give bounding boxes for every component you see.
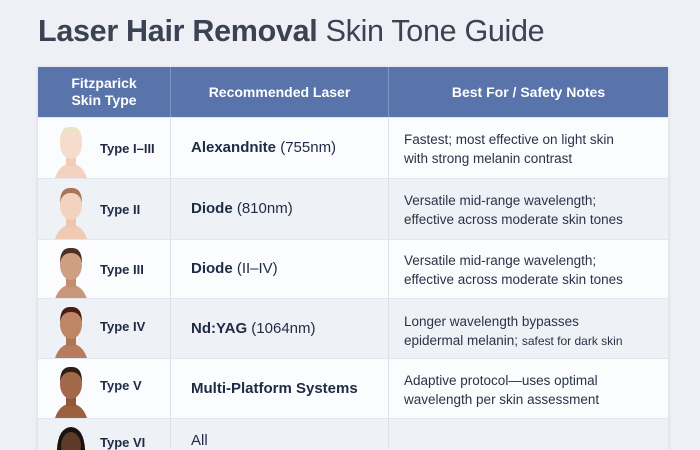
- row: type II: Versatile mid-range wavelength;: [404, 193, 596, 208]
- row: type II: effective across moderate skin tones: [404, 212, 623, 227]
- header row: Recommended Laser: [209, 84, 350, 100]
- row: type VI: [38, 418, 668, 450]
- table: [38, 67, 668, 450]
- title: Laser Hair Removal Skin Tone Guide: [38, 14, 544, 48]
- row: type III: Versatile mid-range wavelength;: [404, 253, 596, 268]
- row: type V: wavelength per skin assessment: [404, 392, 599, 407]
- row: type III: Diode (II–IV): [191, 260, 278, 277]
- row: type IV: epidermal melanin; safest for dark skin: [404, 333, 623, 348]
- row: type II: [38, 178, 668, 239]
- icon: face light-medium: [55, 188, 87, 239]
- row: type II: Diode (810nm): [191, 200, 293, 217]
- icon: face light: [55, 127, 87, 178]
- row: type V: Adaptive protocol—uses optimal: [404, 373, 598, 388]
- row: type V: Multi-Platform Systems: [191, 380, 358, 397]
- row: type III: [38, 239, 668, 298]
- row: type III: Type III: [100, 262, 144, 277]
- row: type I-III: Alexandnite (755nm): [191, 139, 336, 156]
- header row: Fitzparick: [71, 75, 137, 91]
- header row: [38, 67, 668, 117]
- header row: Skin Type: [71, 92, 137, 108]
- row: type I-III: with strong melanin contrast: [404, 151, 572, 166]
- row: type II: Type II: [100, 202, 140, 217]
- row: type I-III: Fastest; most effective on light skin: [404, 132, 614, 147]
- row: type I-III: Type I–III: [100, 141, 155, 156]
- row: type IV: Nd:YAG (1064nm): [191, 320, 316, 337]
- row: type IV: [38, 298, 668, 358]
- row: type IV: Type IV: [100, 319, 145, 334]
- icon: face tan: [55, 307, 87, 358]
- row: type VI: Type VI: [100, 435, 145, 450]
- row: type III: effective across moderate skin tones: [404, 272, 623, 287]
- header row: Best For / Safety Notes: [452, 84, 605, 100]
- row: type IV: Longer wavelength bypasses: [404, 314, 579, 329]
- row: type V: [38, 358, 668, 418]
- row: type I-III: [38, 117, 668, 178]
- row: type VI: All: [191, 432, 208, 449]
- icon: face brown: [55, 367, 87, 418]
- row: type V: Type V: [100, 378, 142, 393]
- icon: face dark: [56, 427, 86, 450]
- icon: face medium: [55, 248, 87, 298]
